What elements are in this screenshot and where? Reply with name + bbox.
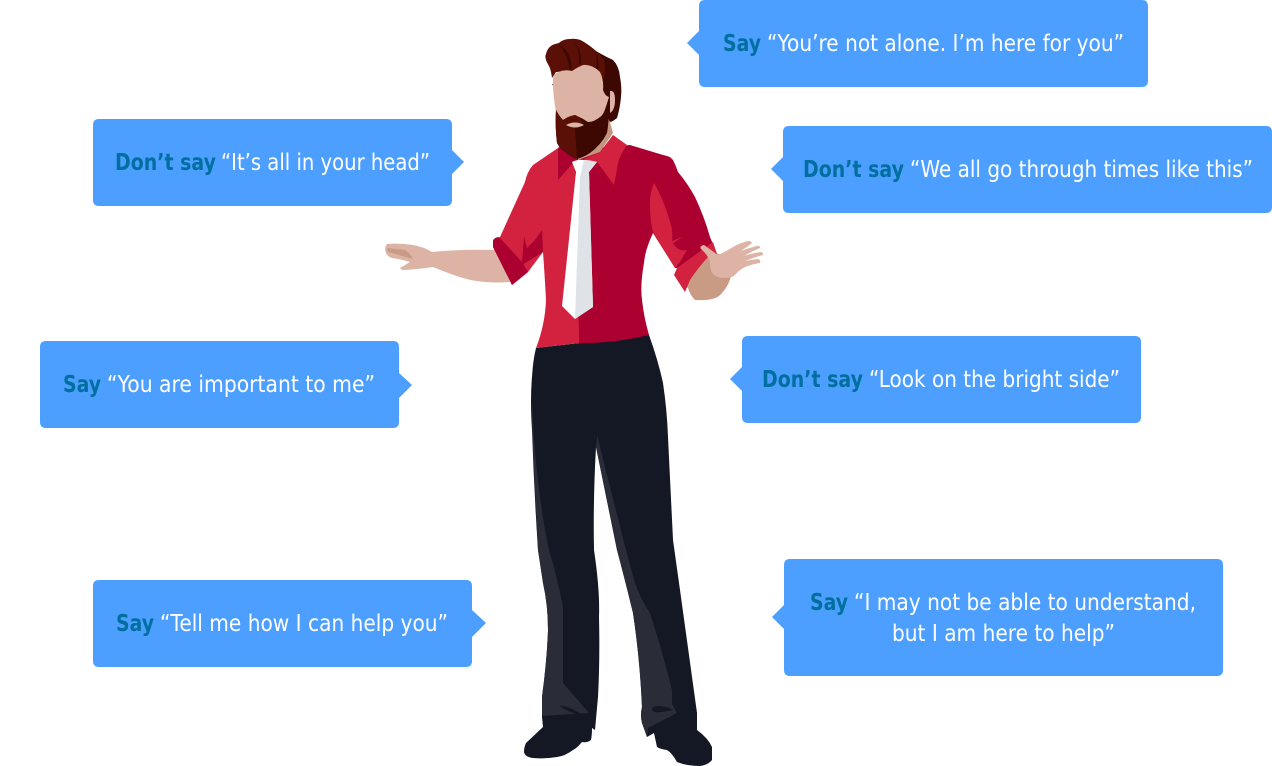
trousers [524, 335, 712, 766]
trouser folds [559, 705, 673, 715]
hair front lighter [545, 39, 605, 78]
tie [562, 160, 597, 319]
right sleeve highlight [650, 183, 687, 268]
callout: say you are important: “You are important to me” [107, 372, 375, 398]
callout: say may not understand: but I am here to help” [892, 621, 1115, 647]
right arm [682, 250, 731, 300]
hair strands [558, 41, 599, 72]
callout: don't say all in your head: Don’t say [115, 150, 216, 176]
callout: don't say all in your head [93, 119, 464, 206]
callout: don't say we all go through: Don’t say [803, 157, 904, 183]
callout: don't say bright side [730, 336, 1141, 423]
callout: don't say bright side: Don’t say [762, 367, 863, 393]
trouser highlight left [532, 398, 589, 716]
illustration: standing man [385, 39, 763, 766]
shirt left light side [493, 148, 579, 348]
collar right [582, 135, 627, 185]
ear [610, 91, 615, 113]
mouth [566, 122, 584, 128]
callout: say may not understand [772, 559, 1223, 676]
face [553, 65, 609, 135]
callout: say may not understand: “I may not be able to understand, [854, 590, 1196, 616]
callout: say may not understand: Say [810, 590, 848, 616]
callout: say not alone [687, 0, 1148, 87]
right hand [700, 241, 763, 278]
beard [556, 97, 609, 159]
trouser highlight right [596, 435, 677, 737]
tie shaded side [575, 160, 597, 319]
left hand finger shading [387, 248, 413, 259]
callout: don't say all in your head: “It’s all in your head” [221, 150, 430, 176]
callout: don't say bright side: “Look on the bright side” [869, 367, 1120, 393]
callout: say tell me how: “Tell me how I can help you” [160, 611, 448, 637]
callout: say you are important: Say [63, 372, 101, 398]
neck [575, 115, 613, 160]
left sleeve folds [520, 230, 543, 265]
left sleeve cuff [493, 237, 528, 285]
callout: say tell me how [93, 580, 486, 667]
collar left [558, 145, 578, 180]
shirt right dark side [575, 145, 717, 343]
callout: don't say we all go through [771, 126, 1272, 213]
beard left [556, 110, 583, 159]
left arm and hand [385, 244, 510, 282]
callout: say not alone: “You’re not alone. I’m here for you” [767, 31, 1124, 57]
callout: say not alone: Say [723, 31, 761, 57]
callout: say tell me how: Say [116, 611, 154, 637]
hair back [552, 46, 621, 122]
callout: say you are important [40, 341, 412, 428]
right cuff [674, 242, 717, 292]
